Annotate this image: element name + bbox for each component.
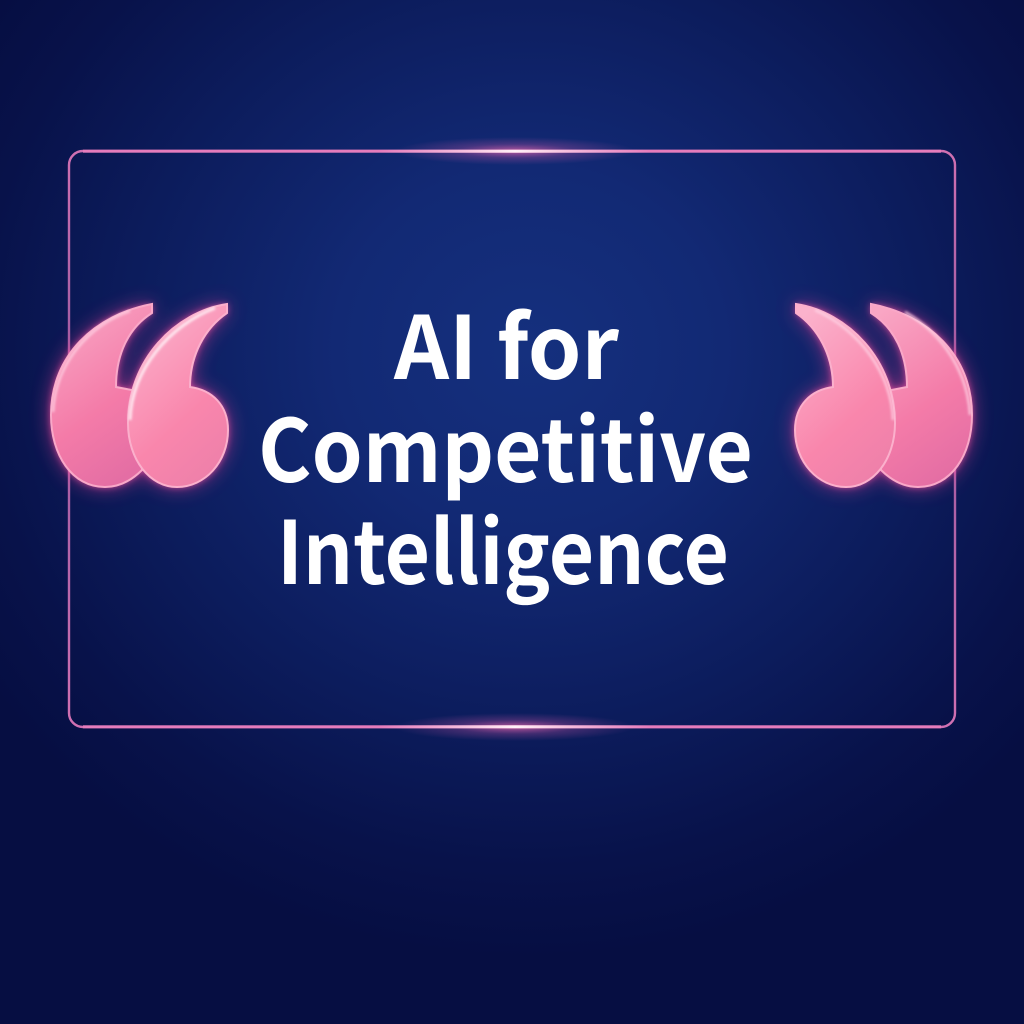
panel frame	[69, 137, 955, 741]
title: Intelligence	[277, 484, 729, 610]
title: AI for	[393, 279, 620, 405]
icon: right quotation mark	[795, 304, 972, 487]
icon: left quotation mark	[51, 304, 228, 487]
title: Competitive	[258, 382, 753, 508]
title	[258, 279, 753, 610]
